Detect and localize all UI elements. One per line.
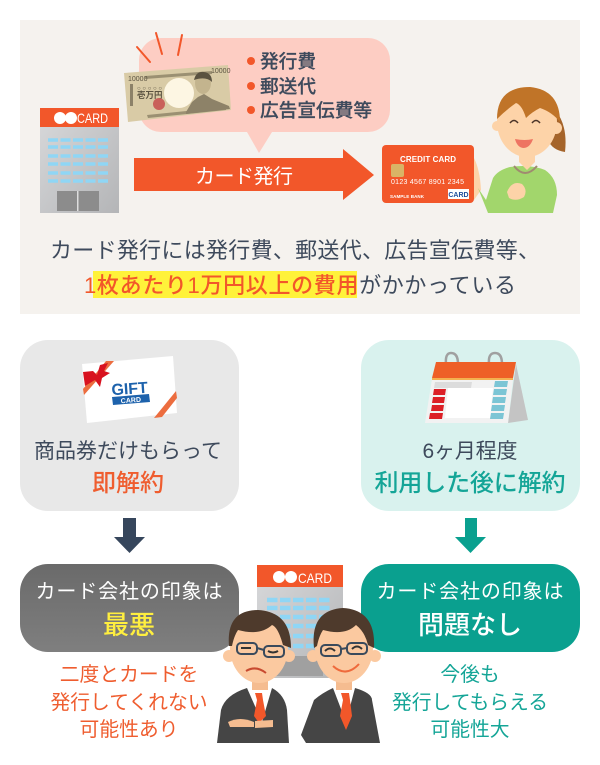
text: can issue again: 可能性大 [430, 719, 510, 741]
illustration: frowning businessman [217, 610, 295, 743]
icon: credit card: CREDIT CARD [400, 155, 456, 164]
highlight: cost per card [93, 271, 357, 298]
callout: worst impression [20, 564, 239, 652]
icon: gift card: CARD [121, 397, 141, 405]
text: cancel immediately: 即解約 [92, 470, 164, 497]
text: can issue again: 今後も [440, 664, 500, 686]
icon: gift card [82, 356, 177, 423]
icon: 10000 yen banknote: 壱万円 [137, 90, 163, 100]
icon: 10000 yen banknote: 10000 [128, 76, 148, 83]
icon: card company building [40, 108, 119, 213]
illustration: smiling woman [474, 87, 566, 213]
text: can issue again [392, 664, 548, 741]
icon: desk calendar [425, 353, 528, 423]
text: may not issue again: 二度とカードを [60, 664, 198, 686]
callout: no problem impression [361, 564, 580, 652]
panel: cancel after use [361, 340, 580, 511]
callout: worst impression: 最悪 [103, 610, 155, 640]
icon: central card company building [257, 565, 343, 678]
illustration: smiling businessman [301, 608, 381, 743]
icon: credit card: SAMPLE BANK [390, 194, 425, 199]
icon: credit card: CARD [448, 192, 469, 199]
callout: worst impression: カード会社の印象は [36, 580, 222, 603]
icon: central card company building: CARD [298, 570, 332, 586]
speech bubble: cost items [139, 38, 390, 153]
panel: immediate cancellation [20, 340, 239, 511]
icon: 10000 yen banknote: 10000 [211, 68, 231, 75]
arrow: card issuance [134, 149, 374, 200]
text: about six months: 6ヶ月程度 [422, 440, 518, 463]
text: issuance costs line 1: カード発行には発行費、郵送代、広告宣伝費等、 [50, 238, 540, 263]
icon: card company building: CARD [77, 110, 108, 126]
text: issuance costs line 2: 1枚あたり1万円以上の費用がかかっている [84, 273, 516, 298]
text: only gift voucher: 商品券だけもらって [34, 440, 222, 463]
callout: no problem impression: カード会社の印象は [376, 580, 564, 603]
icon: 10000 yen banknote [124, 65, 231, 122]
text: may not issue again [50, 664, 208, 741]
arrow: card issuance: カード発行 [195, 165, 293, 188]
icon: credit card: 0123 4567 8901 2345 [391, 179, 464, 186]
panel: card issuance cost [20, 20, 580, 314]
speech bubble: cost items: 郵送代 [260, 76, 316, 97]
text: may not issue again: 発行してくれない [50, 692, 208, 714]
speech bubble: cost items: 発行費 [260, 51, 316, 72]
arrow: right downward [455, 518, 486, 553]
text: may not issue again: 可能性あり [80, 719, 178, 741]
icon: credit card [382, 145, 474, 203]
callout: no problem impression: 問題なし [418, 610, 522, 640]
text: can issue again: 発行してもらえる [392, 692, 548, 714]
icon: 10000 yen banknote: ○○○○○ [137, 86, 162, 92]
speech bubble: cost items: 広告宣伝費等 [260, 100, 372, 121]
arrow: left downward [114, 518, 145, 553]
icon: gift card: GIFT [111, 380, 149, 399]
text: cancel after using: 利用した後に解約 [374, 470, 566, 497]
icon: emphasis lines [137, 33, 182, 62]
